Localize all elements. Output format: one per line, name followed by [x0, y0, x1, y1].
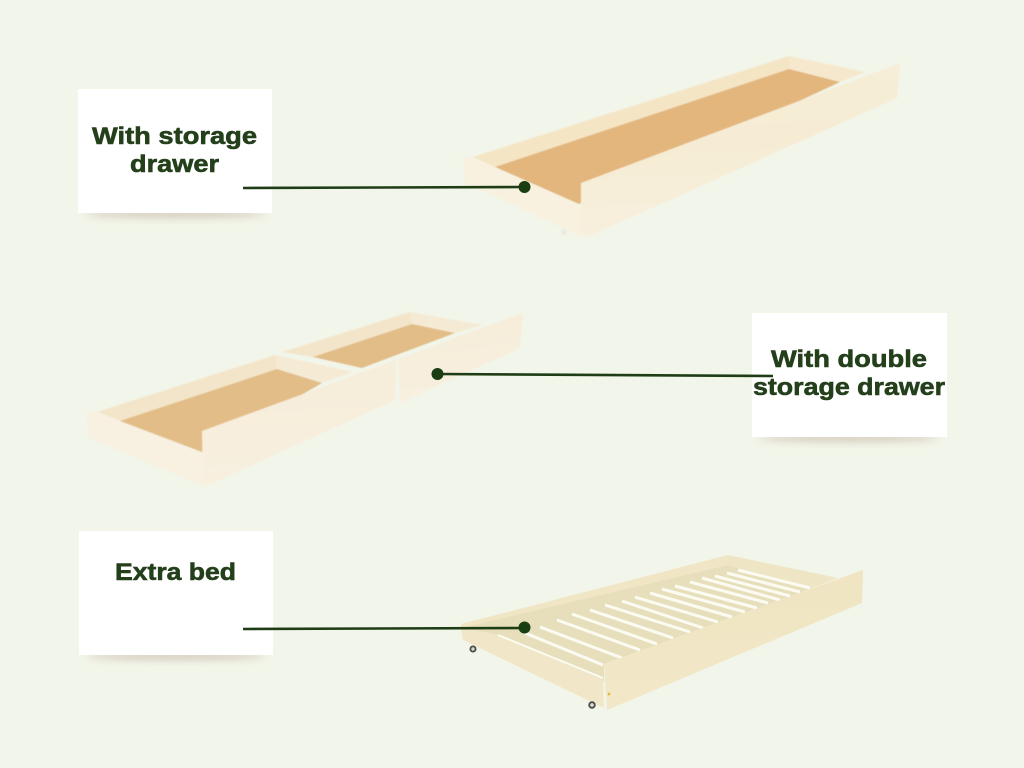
- card: with double storage drawer: [752, 313, 947, 442]
- callout: storage drawer pointer: [243, 181, 530, 193]
- product: double storage drawer: [87, 312, 523, 487]
- bed slats: [525, 570, 810, 665]
- label: with double storage drawer: storage drawer: [753, 374, 945, 401]
- card: extra bed: [79, 531, 273, 660]
- product: extra bed: [461, 555, 863, 710]
- casters: [470, 646, 476, 652]
- product: single storage drawer: [463, 56, 900, 238]
- label: with storage drawer: [92, 123, 257, 178]
- label: extra bed: Extra bed: [115, 559, 236, 586]
- label: with storage drawer: drawer: [130, 151, 219, 178]
- label: with double storage drawer: [753, 346, 945, 401]
- callout: extra bed pointer: [243, 622, 530, 634]
- card: with storage drawer: [78, 89, 272, 218]
- label: with double storage drawer: With double: [771, 346, 927, 373]
- label: with storage drawer: With storage: [92, 123, 257, 150]
- callout: double storage drawer pointer: [432, 368, 773, 380]
